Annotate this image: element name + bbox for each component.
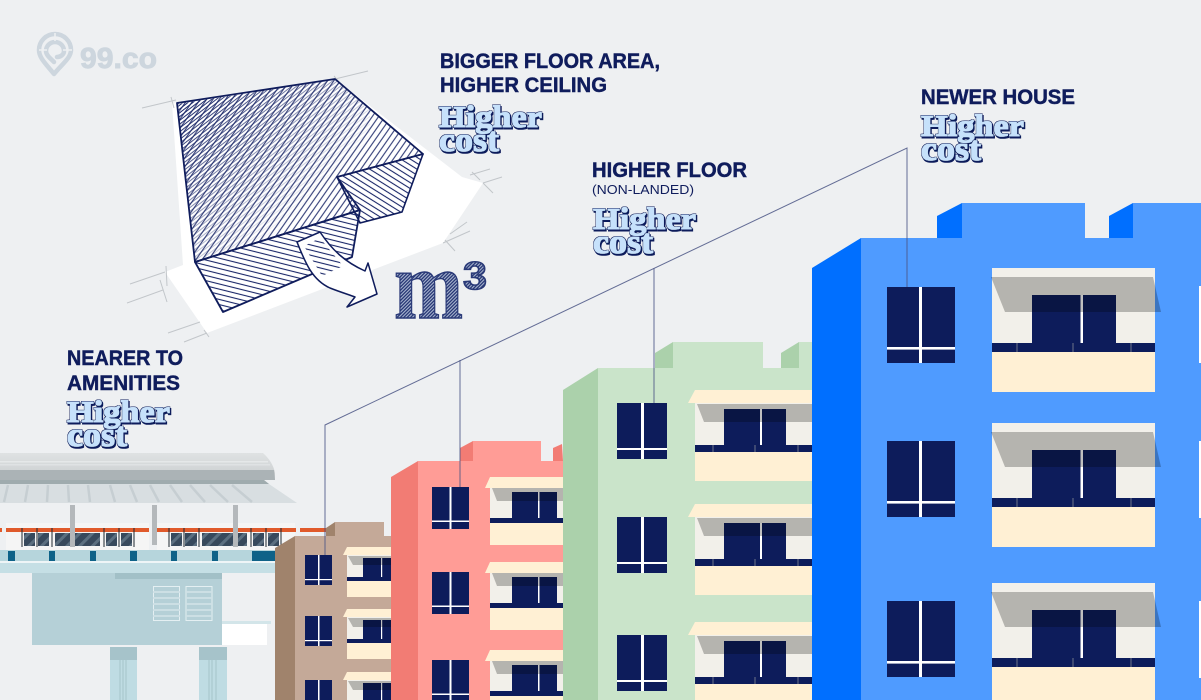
train — [0, 523, 330, 550]
arrow hatching — [304, 238, 343, 276]
label: bigger floor area — [439, 50, 660, 159]
label: nearer to amenities: NEARER TO — [67, 347, 183, 370]
arrow — [297, 232, 377, 307]
green front wall — [598, 368, 813, 700]
pillars — [110, 647, 227, 700]
label: nearer to amenities: Higher — [67, 394, 170, 429]
white floor plate — [165, 79, 483, 333]
label: newer house — [921, 86, 1075, 168]
label: bigger floor area: HIGHER CEILING — [440, 74, 607, 97]
coral side wall — [391, 461, 418, 700]
top face hatching — [177, 79, 423, 262]
label: higher floor: Higher — [593, 201, 696, 236]
label: higher floor — [592, 159, 747, 261]
building: brown — [275, 522, 407, 700]
superscript 3: 3 — [463, 255, 487, 298]
label: nearer to amenities — [67, 347, 183, 454]
label: newer house: Higher — [921, 108, 1024, 143]
station lower canopy — [0, 480, 297, 503]
coral roof blocks — [460, 441, 473, 461]
station columns — [70, 505, 238, 547]
front face hatching — [195, 210, 360, 312]
construction lines — [127, 71, 502, 342]
label: higher floor: HIGHER FLOOR — [592, 159, 747, 182]
label: bigger floor area: cost — [439, 122, 500, 159]
building: coral — [391, 441, 580, 700]
label: higher floor: (NON-LANDED) — [592, 182, 694, 197]
label: nearer to amenities: cost — [67, 417, 128, 454]
label: higher floor: cost — [593, 224, 654, 261]
logo wordmark: 99.co — [80, 43, 157, 75]
station building block — [32, 573, 271, 645]
coral front wall — [418, 461, 563, 700]
label: bigger floor area: Higher — [439, 99, 542, 134]
blue front wall — [861, 238, 1201, 700]
label: nearer to amenities: AMENITIES — [67, 372, 180, 395]
m cubed: m — [394, 232, 463, 340]
brown side wall — [275, 536, 295, 700]
station upper roof — [0, 453, 275, 480]
green side wall — [563, 368, 598, 700]
right face hatching — [337, 154, 423, 223]
blue side wall — [812, 238, 861, 700]
label: newer house: cost — [921, 131, 982, 168]
brown front wall — [295, 536, 391, 700]
viaduct deck — [0, 550, 276, 573]
building: blue — [812, 203, 1201, 700]
label: bigger floor area: BIGGER FLOOR AREA, — [440, 50, 660, 73]
leader lines — [325, 148, 907, 555]
label: newer house: NEWER HOUSE — [921, 86, 1075, 109]
blue roof blocks — [937, 203, 962, 238]
denser hatching — [178, 80, 370, 260]
MRT station — [0, 453, 330, 700]
sketch: floor plan volume with m3 — [127, 71, 502, 342]
vents — [153, 586, 212, 620]
green roof blocks — [655, 342, 673, 368]
building: green — [563, 342, 825, 700]
brown roof block — [326, 522, 335, 536]
logo: 99.co — [39, 33, 157, 75]
icon: location pin — [39, 33, 72, 74]
